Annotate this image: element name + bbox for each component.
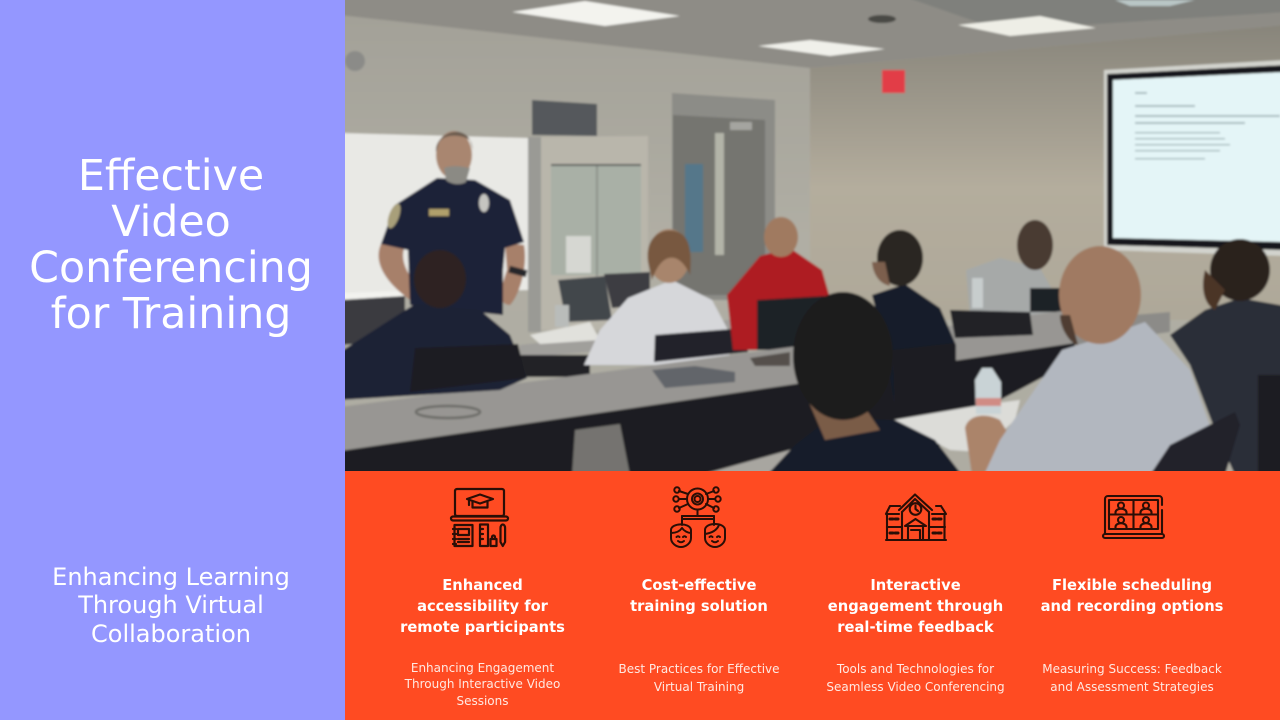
title: Effective [78,151,264,201]
subtitle [52,563,290,648]
exit sign [882,70,905,93]
text: scheduling detail: Measuring Success: Feedback [1042,662,1222,676]
person: white shirt [584,229,748,365]
person: right dark shirt [1170,239,1280,475]
subtitle: Collaboration [91,620,251,648]
papers and bottle [893,400,1020,452]
subtitle: Through Virtual [78,591,264,619]
text: accessibility detail: Enhancing Engagement [411,660,554,674]
heading: engagement: real-time feedback [837,618,994,636]
heading: scheduling: and recording options [1041,598,1223,614]
person: front dark hair [767,292,962,475]
text: cost detail [618,662,780,694]
text: engagement detail: Tools and Technologies for [837,662,994,676]
person: dark shirt middle [872,230,958,415]
ceiling [340,0,1280,68]
heading: cost: training solution [630,598,768,614]
title: Conferencing [29,243,313,293]
text: accessibility detail: Through Interactive Video [405,677,560,691]
heading: engagement [828,576,1003,636]
person: seated navy left [340,250,527,400]
icon: network node above two faces [670,486,726,548]
icon: laptop video call grid [1102,495,1165,539]
heading: accessibility: Enhanced [442,576,523,594]
front table [340,311,1075,451]
text: accessibility detail [404,660,560,708]
heading: accessibility: remote participants [400,618,565,636]
title: for Training [51,289,291,339]
door [672,93,775,300]
panel: benefits band [345,471,1280,720]
heading: scheduling: Flexible scheduling [1052,576,1212,594]
text: accessibility detail: Sessions [456,694,509,708]
heading: cost [630,576,768,614]
heading: engagement: engagement through [828,598,1003,614]
heading: engagement: Interactive [870,576,961,594]
person: red shirt [727,217,830,350]
whiteboard [340,133,528,295]
heading: cost: Cost-effective [642,576,756,594]
cabinet [528,136,648,330]
photo: classroom training session [345,0,1280,471]
heading: scheduling [1041,576,1223,614]
text: engagement detail [826,662,1005,694]
subtitle: Enhancing Learning [52,563,290,591]
heading: accessibility [400,576,565,636]
text: cost detail: Best Practices for Effective [618,662,780,676]
briefcase [950,310,1033,338]
title: Video [111,197,231,247]
text: scheduling detail [1042,662,1222,694]
title [29,151,313,339]
person: bald man grey shirt [965,246,1240,475]
person: instructor [379,131,527,315]
back tables and laptops [558,276,612,322]
heading: accessibility: accessibility for [417,598,548,614]
projection screen [1104,60,1280,256]
icon: school building [884,493,948,541]
panel: left sidebar [0,0,345,720]
person: grey shirt woman [966,220,1062,316]
text: engagement detail: Seamless Video Conferencing [826,680,1005,694]
text: cost detail: Virtual Training [654,680,744,694]
icon: laptop with graduation cap and stationery [450,488,510,548]
text: scheduling detail: and Assessment Strategies [1050,680,1214,694]
